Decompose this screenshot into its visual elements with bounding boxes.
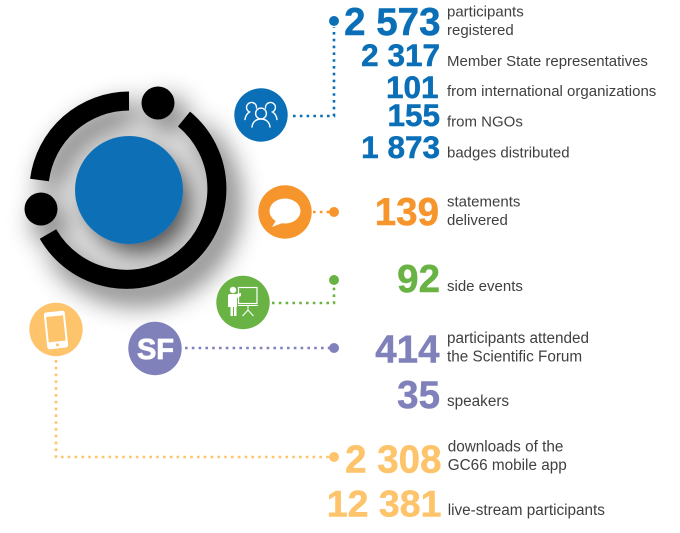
stat: 139 statements delivered [375,191,520,234]
logo ring and satellites [24,86,217,279]
stat: 92 side events: side events [447,278,523,295]
stat: 414 Scientific Forum participants: participants attended [447,330,589,347]
stat: 2 308 downloads: downloads of the [448,438,563,456]
stat: 101 from international organizations [386,69,656,105]
stat: 2 308 downloads: GC66 mobile app [448,457,567,474]
stat: 2 573 participants registered [344,1,524,44]
stat: 1 873 badges distributed [361,129,570,165]
stat: 2 573 participants registered: 2 573 [344,1,440,44]
icon: SF: SF [137,334,174,366]
stat: 1 873 badges distributed: 1 873 [361,129,440,165]
stat: 101 from international organizations: from international organizations [447,83,656,100]
stat: 139 statements delivered: delivered [447,212,508,229]
stat: 139 statements delivered: 139 [375,191,439,234]
stat: 2 573 participants registered: participants [447,4,524,20]
stat: 155 from NGOs: 155 [387,97,440,133]
stat: 155 from NGOs: from NGOs [447,114,523,130]
stat: 92 side events: 92 [397,258,440,301]
stat: 2 308 downloads: 2 308 [345,438,442,482]
central logo [24,86,217,279]
stat: 1 873 badges distributed: badges distributed [447,144,570,162]
connector: statements [313,207,339,217]
stat: 92 side events [397,258,523,301]
stat: 35 speakers: speakers [447,393,509,410]
stat: 35 speakers [397,374,509,417]
stat: 414 Scientific Forum participants [375,328,589,372]
stat: 101 from international organizations: 101 [386,69,438,105]
stat: 155 from NGOs [387,97,523,133]
stat: 12 381 live-stream participants: 12 381 [327,482,442,524]
icon: mobile phone [29,303,83,356]
stat: 2 573 participants registered: registered [447,22,514,39]
stat: 2 317 Member State representatives: 2 317 [361,37,440,73]
connector: Scientific Forum [185,343,339,353]
icon: people [234,88,288,142]
stat: 12 381 live-stream participants: live-stream participants [448,502,605,519]
stat: 414 Scientific Forum participants: 414 [375,328,440,372]
logo centre disc [75,136,183,244]
stat: 2 308 downloads [345,438,567,482]
connector: side events [272,275,339,303]
stat: 2 317 Member State representatives [361,37,648,73]
stat: 414 Scientific Forum participants: the Scientific Forum [447,348,582,366]
stat: 2 317 Member State representatives: Member State representatives [447,53,648,70]
stat: 12 381 live-stream participants [327,482,605,524]
connector: participants [293,16,339,116]
icon: SF [128,322,182,375]
connector: mobile app [56,360,339,462]
icon: speech bubble [258,185,312,239]
icon: presenter at board [216,276,270,329]
stat: 35 speakers: 35 [397,374,440,417]
stat: 139 statements delivered: statements [447,194,520,210]
